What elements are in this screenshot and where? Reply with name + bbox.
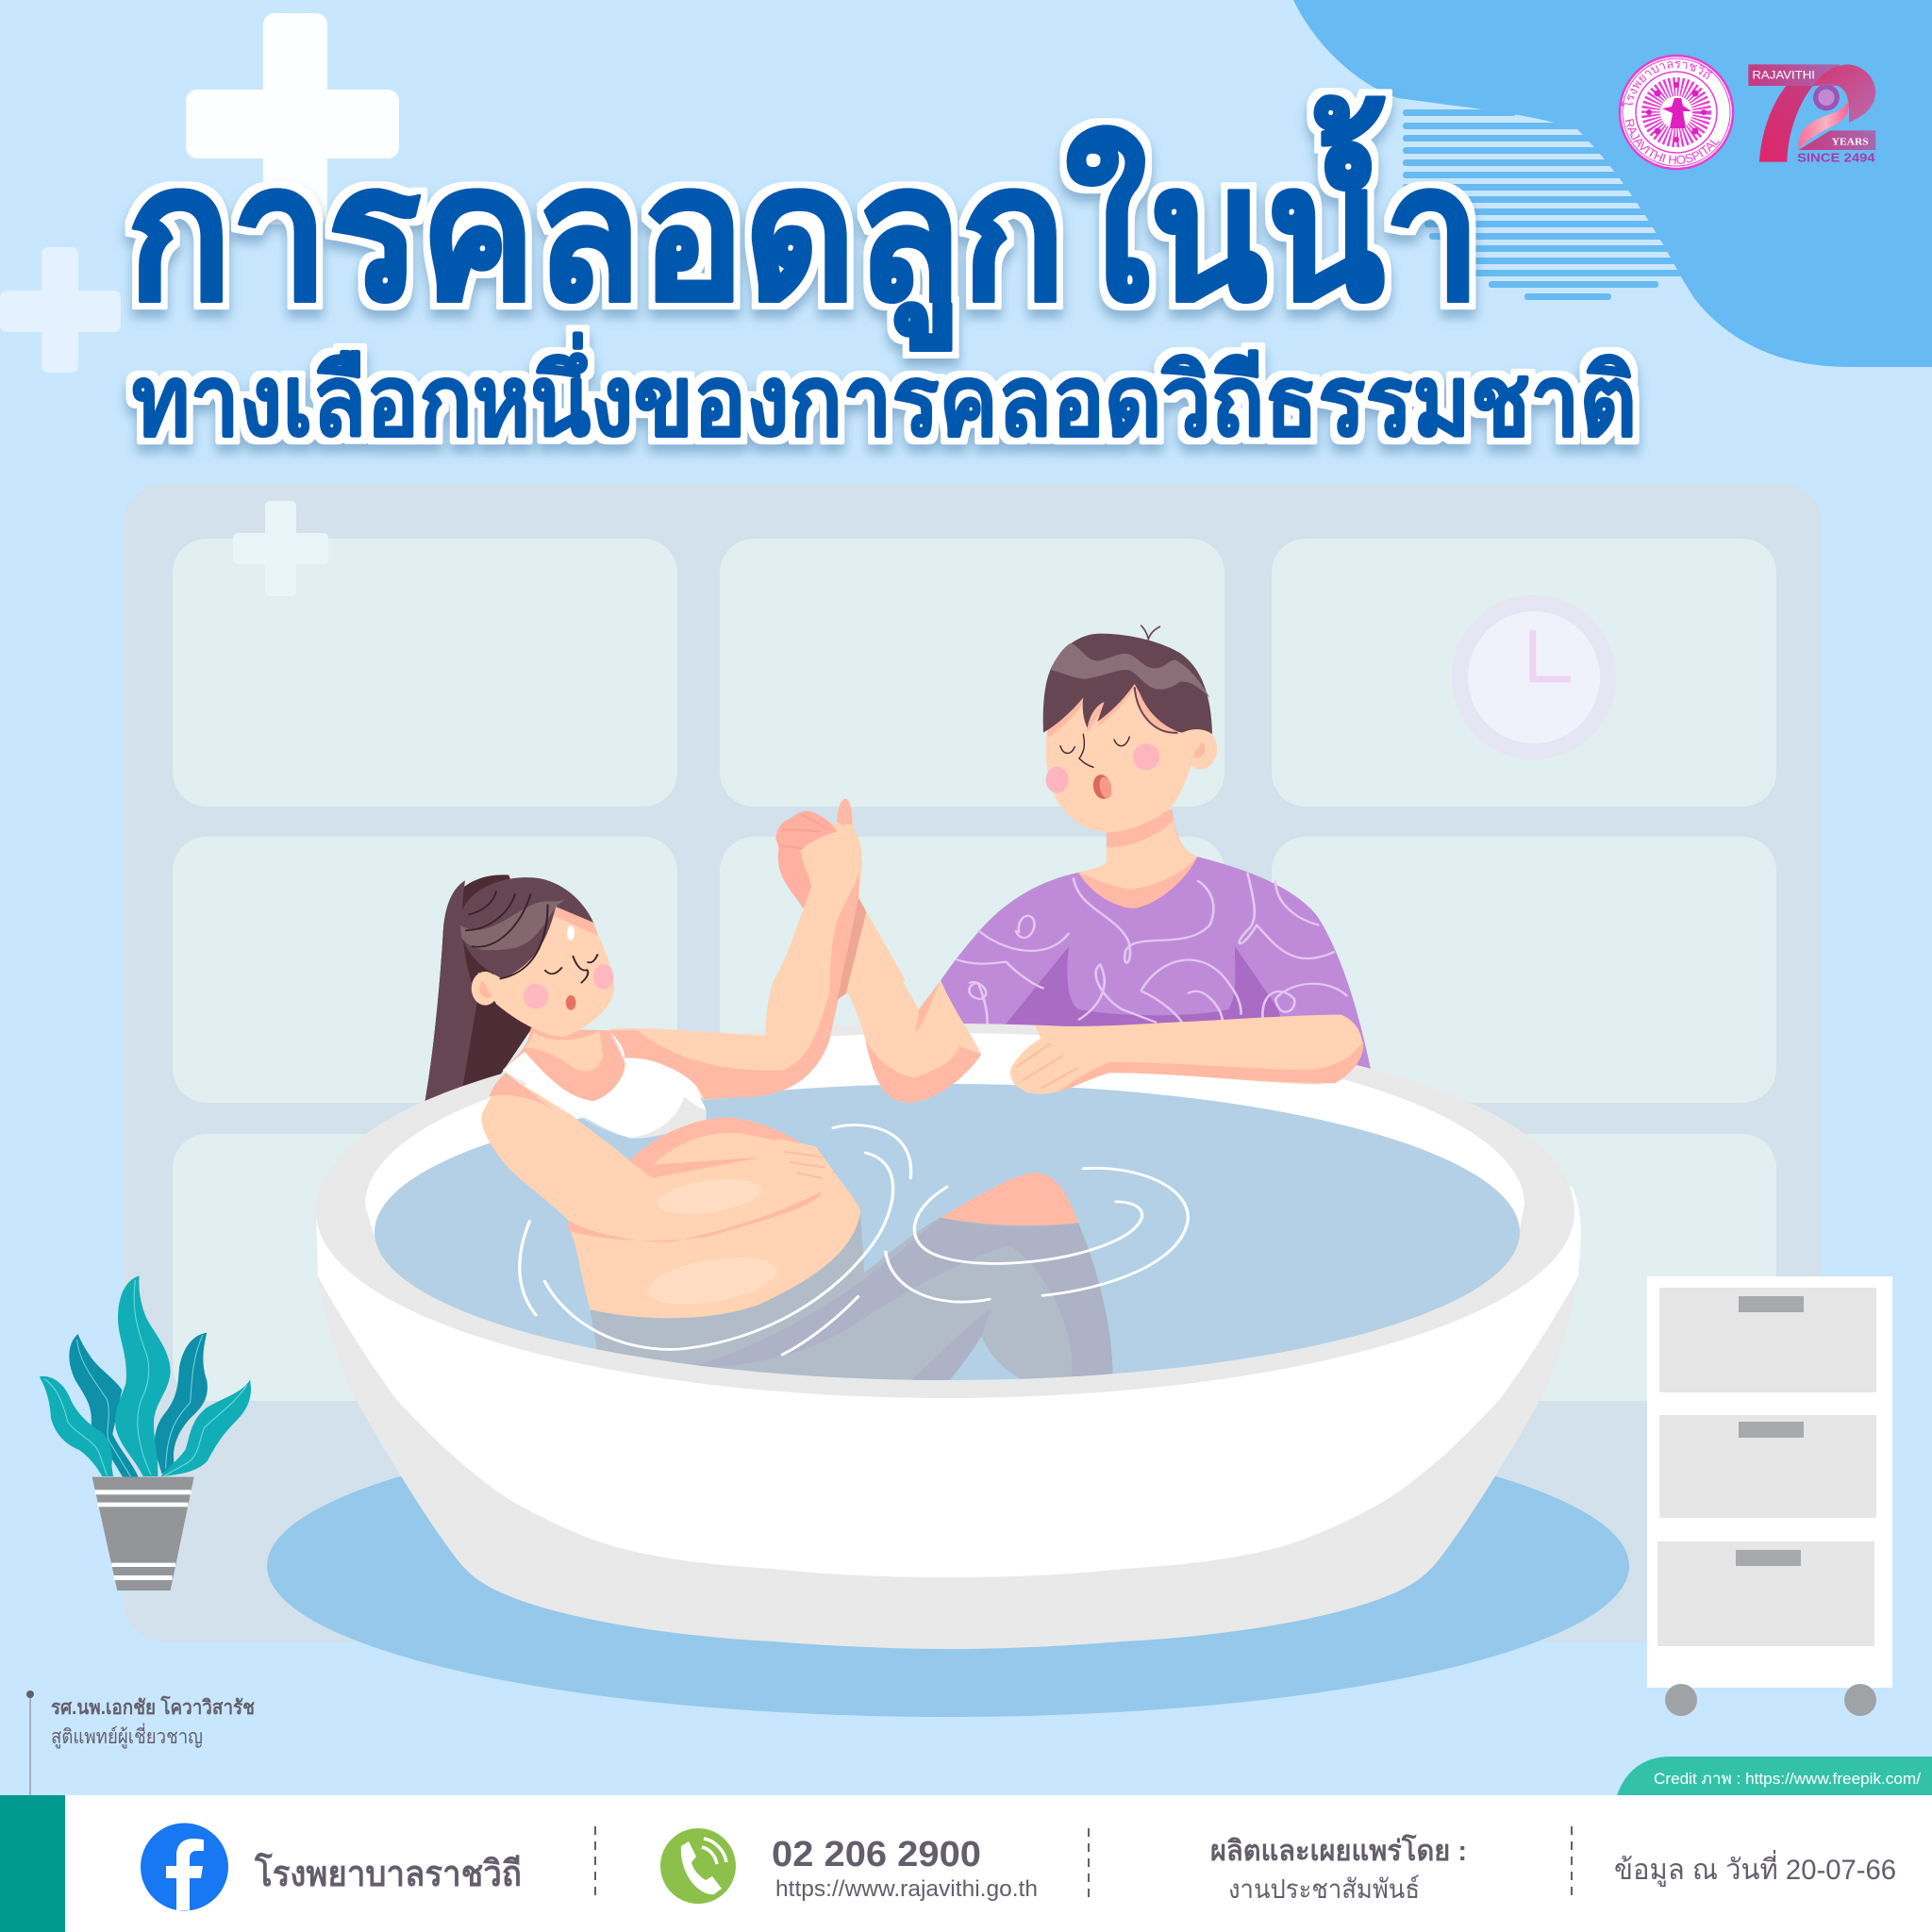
- woman white top: [503, 1030, 706, 1139]
- people behind tub: [425, 809, 1373, 1105]
- woman belly: [569, 1118, 860, 1318]
- image credit tab: Credit ภาพ : https://www.freepik.com/: [1654, 1770, 1921, 1788]
- tub: [316, 1024, 1581, 1649]
- logo: Rajavithi hospital seal: โรงพยาบาลราชวิถี: [1621, 60, 1713, 108]
- woman fringe hair: [460, 877, 593, 979]
- publisher: งานประชาสัมพันธ์: [1228, 1874, 1420, 1904]
- footer bar: [0, 1795, 1932, 1932]
- small pale cross: [0, 247, 121, 373]
- logo: Rajavithi 72 years: YEARS: [1832, 137, 1869, 148]
- dividers: [595, 1826, 1572, 1899]
- big white cross: [186, 13, 399, 225]
- phone and website: [772, 1835, 1038, 1902]
- logo: Rajavithi 72 years: RAJAVITHI: [1752, 69, 1815, 82]
- icon: wall clock: [1452, 595, 1616, 759]
- subtitle: ทางเลือกหนึ่งของการคลอดวิถีธรรมชาติ: [132, 332, 1637, 457]
- author credit: [26, 1690, 255, 1795]
- publisher: [1210, 1833, 1467, 1904]
- panel: window wall: [124, 484, 1822, 1641]
- decorative blue blob top right: [1293, 0, 1932, 367]
- woman knee: [941, 1173, 1078, 1225]
- phone and website: https://www.rajavithi.go.th: [775, 1876, 1038, 1902]
- woman face: [472, 904, 614, 1037]
- publisher: ผลิตและเผยแพร่โดย :: [1210, 1833, 1467, 1867]
- data date: ข้อมูล ณ วันที่ 20-07-66: [1614, 1850, 1896, 1887]
- logo: Rajavithi hospital seal: [1619, 55, 1734, 170]
- medical cabinet: [1647, 1276, 1892, 1716]
- man raised arm: [841, 904, 981, 1103]
- potted plant: [40, 1275, 251, 1591]
- water ripples: [520, 1125, 1188, 1355]
- facebook page name: โรงพยาบาลราชวิถี: [254, 1852, 522, 1894]
- author credit: รศ.นพ.เอกชัย โควาวิสารัช: [51, 1695, 255, 1719]
- clasped hands: [774, 799, 906, 1000]
- logo: Rajavithi hospital seal: RAJAVITHI HOSPITAL: [1624, 119, 1720, 164]
- woman raised arm: [609, 804, 862, 1100]
- man lower arm and hand: [1010, 1015, 1363, 1094]
- man shirt: [941, 857, 1373, 1078]
- icon: facebook: [141, 1823, 228, 1911]
- woman back hair: [425, 874, 541, 1105]
- logo: Rajavithi 72 years: SINCE 2494: [1797, 150, 1875, 164]
- people in and over tub: [460, 804, 1363, 1355]
- title: การคลอดลูกในน้ำ: [127, 95, 1481, 351]
- woman neck and chest: [503, 1028, 625, 1103]
- phone and website: 02 206 2900: [772, 1835, 981, 1874]
- image credit tab: [1617, 1757, 1932, 1795]
- rug: [267, 1415, 1629, 1717]
- cross on wall: [233, 501, 328, 596]
- woman legs under water: [591, 1213, 1113, 1380]
- logo: Rajavithi 72 years: [1748, 64, 1875, 164]
- striped wedge: [1396, 104, 1717, 321]
- author credit: สูติแพทย์ผู้เชี่ยวชาญ: [51, 1723, 203, 1749]
- icon: phone: [660, 1828, 736, 1904]
- man neck: [1078, 809, 1197, 908]
- man head: [1043, 625, 1217, 832]
- woman resting arm: [481, 1073, 833, 1236]
